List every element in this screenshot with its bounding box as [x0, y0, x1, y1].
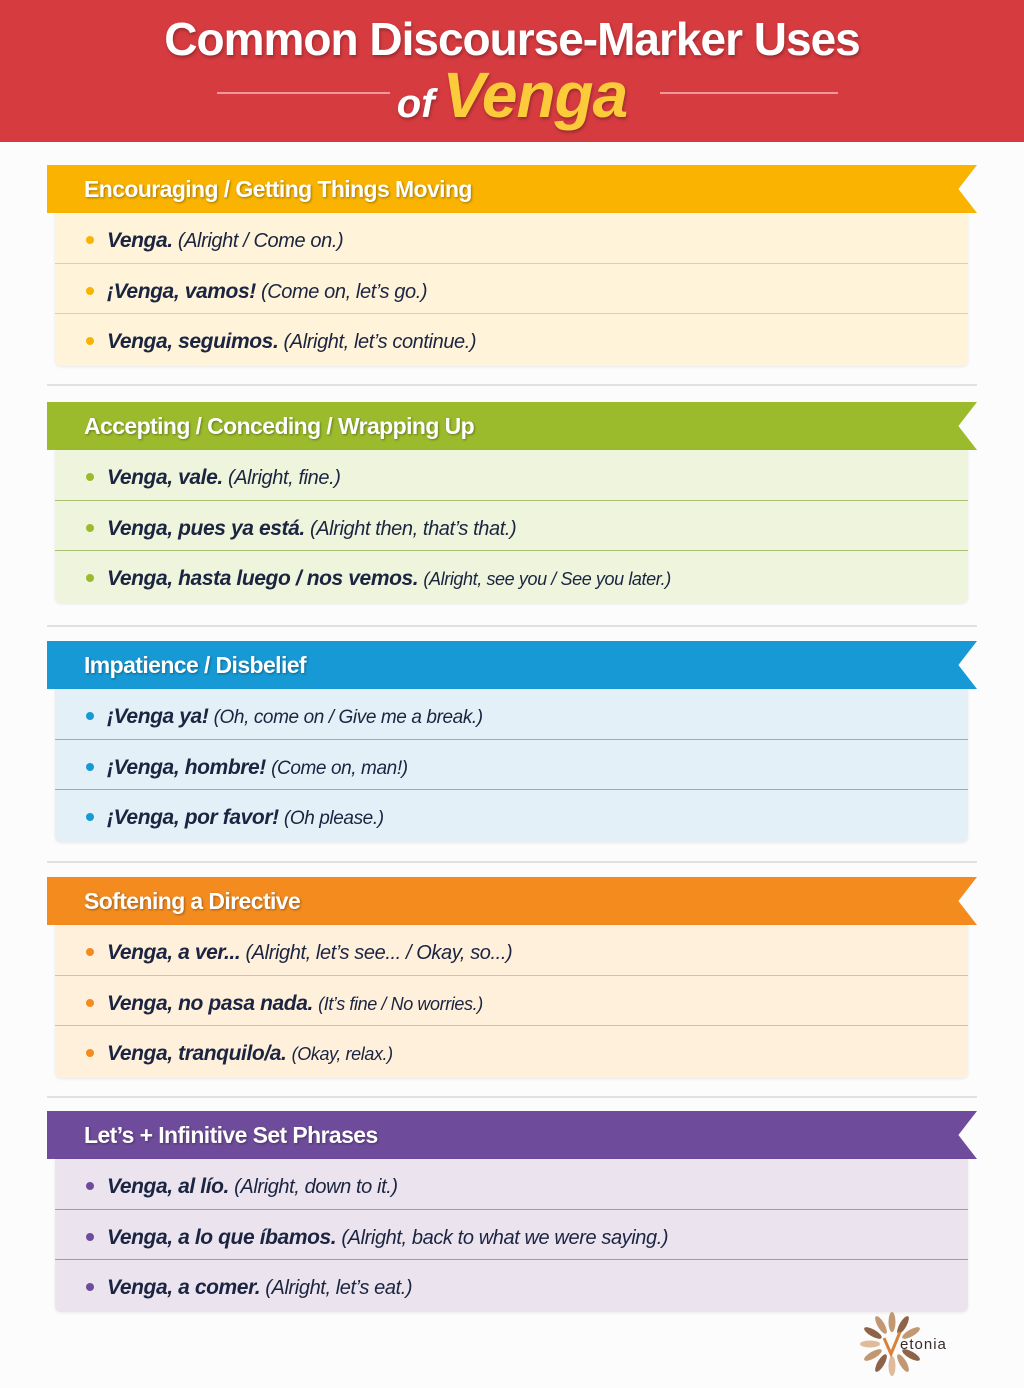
list: softening: Venga, a ver... (Alright, let’s see... / Okay, so...) [107, 941, 512, 964]
list: softening: Venga, tranquilo/a. (Okay, relax.) [107, 1042, 393, 1065]
banner: softening [47, 877, 977, 925]
list: accepting: Venga, pues ya está. (Alright then, that’s that.) [107, 517, 516, 540]
banner: encouraging: Encouraging / Getting Things Moving [84, 176, 472, 202]
list: let's + infinitive: Venga, al lío. (Alright, down to it.) [107, 1175, 398, 1198]
list: encouraging [55, 213, 968, 366]
list: softening: Venga, no pasa nada. (It’s fine / No worries.) [107, 992, 483, 1015]
logo: Vetonia [860, 1312, 947, 1376]
banner: let's + infinitive [47, 1111, 977, 1159]
banner: accepting [47, 402, 977, 450]
list: impatience: ¡Venga ya! (Oh, come on / Give me a break.) [107, 705, 483, 728]
logo: Vetonia: etonia [900, 1336, 947, 1353]
subtitle: of Venga: ofVenga [397, 59, 627, 131]
list: impatience: ¡Venga, hombre! (Come on, man!) [107, 756, 408, 779]
list: accepting [55, 450, 968, 603]
list: let's + infinitive: Venga, a comer. (Alright, let’s eat.) [107, 1276, 412, 1299]
panel: impatience [47, 641, 977, 843]
list: let's + infinitive [55, 1159, 968, 1312]
panel: encouraging [47, 165, 977, 367]
banner: let's + infinitive: Let’s + Infinitive Set Phrases [84, 1122, 378, 1148]
header [0, 0, 1024, 142]
list: encouraging: ¡Venga, vamos! (Come on, let’s go.) [107, 280, 427, 303]
banner: accepting: Accepting / Conceding / Wrapping Up [84, 413, 474, 439]
banner: softening: Softening a Directive [84, 888, 300, 914]
banner: impatience [47, 641, 977, 689]
panel: softening [47, 877, 977, 1079]
list: let's + infinitive: Venga, a lo que íbamos. (Alright, back to what we were saying.) [107, 1226, 668, 1249]
panel: accepting [47, 402, 977, 604]
title: Common Discourse-Marker Uses [164, 13, 860, 65]
list: impatience: ¡Venga, por favor! (Oh please.) [107, 806, 384, 829]
list: accepting: Venga, hasta luego / nos vemos. (Alright, see you / See you later.) [107, 567, 671, 590]
banner: encouraging [47, 165, 977, 213]
banner: impatience: Impatience / Disbelief [84, 652, 306, 678]
list: encouraging: Venga. (Alright / Come on.) [107, 229, 343, 252]
panel: let's + infinitive [47, 1111, 977, 1313]
list: encouraging: Venga, seguimos. (Alright, let’s continue.) [107, 330, 476, 353]
list: accepting: Venga, vale. (Alright, fine.) [107, 466, 341, 489]
list: impatience [55, 689, 968, 842]
list: softening [55, 925, 968, 1078]
